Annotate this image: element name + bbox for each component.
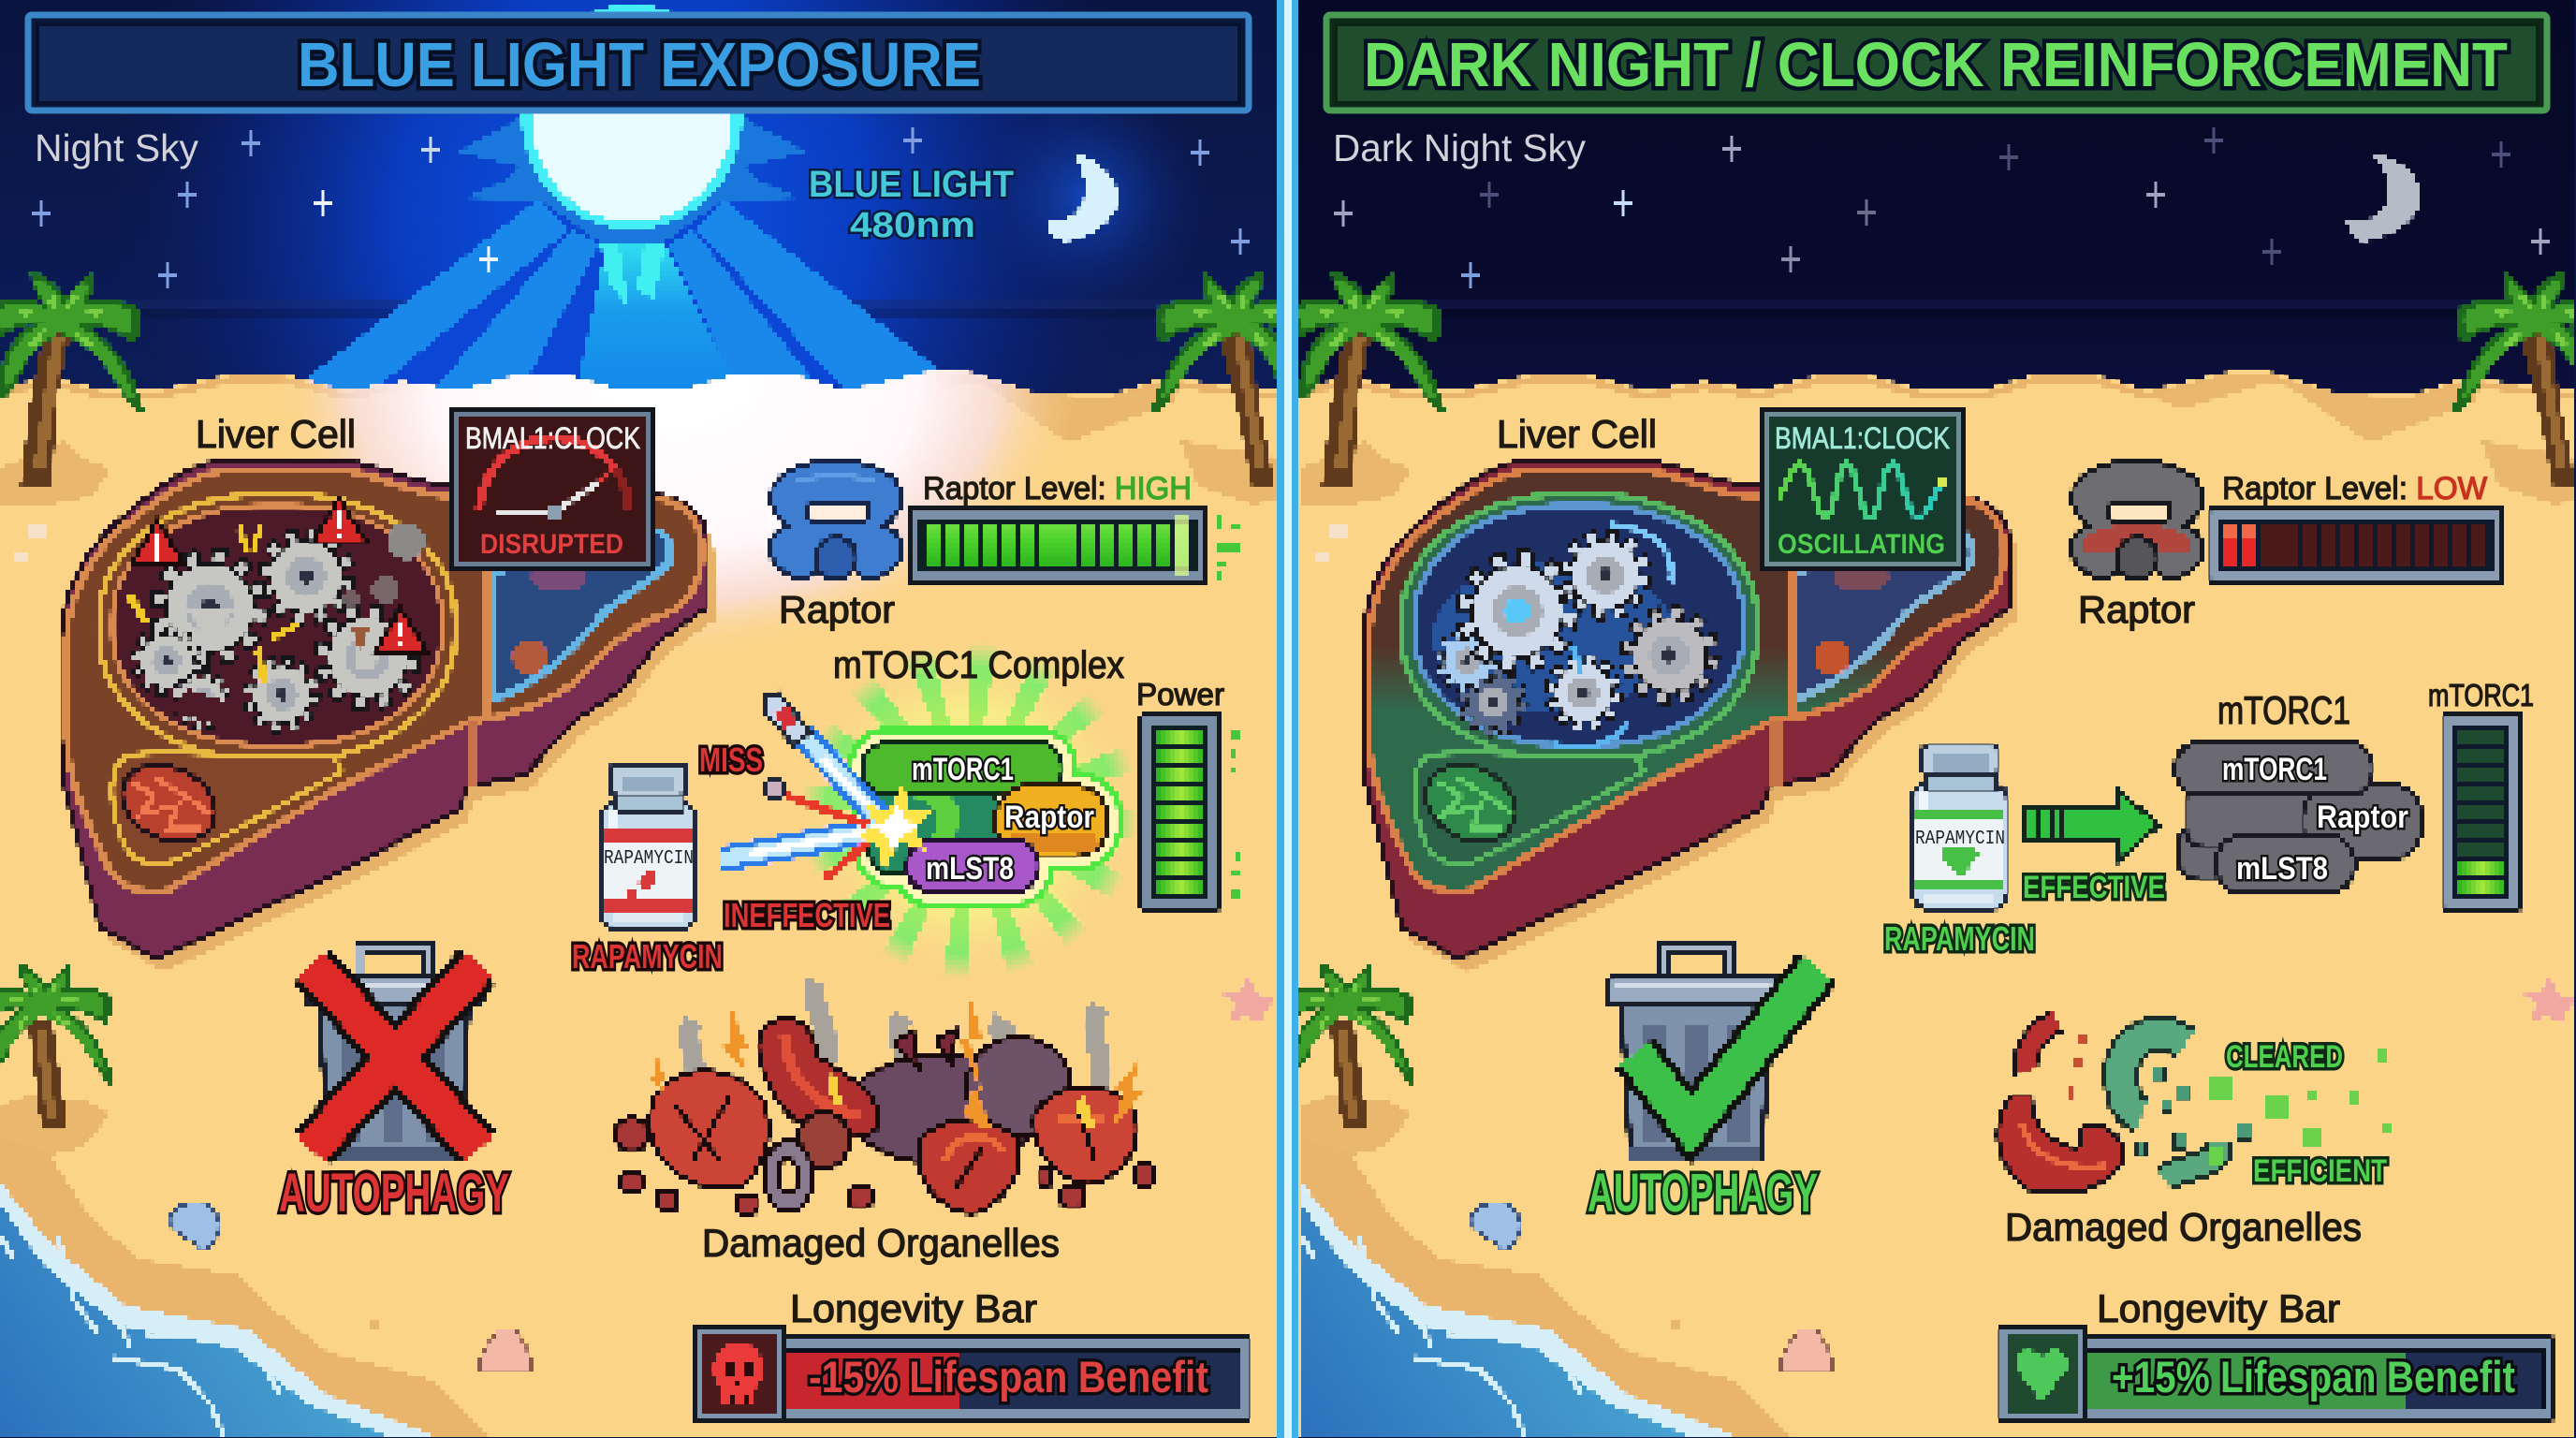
rapamycin bottle: red [601, 764, 696, 929]
BMAL1:CLOCK disrupted panel [451, 410, 654, 569]
title banner: dark night clock reinforcement: DARK NIGHT / CLOCK REINFORCEMENT [1364, 30, 2508, 100]
damaged organelles label: Damaged Organelles [702, 1221, 1060, 1265]
night sky with glow [0, 0, 1288, 403]
trash can with red X [306, 948, 482, 1160]
raptor level bar: high [909, 507, 1239, 583]
BMAL1:CLOCK label: BMAL1:CLOCK [1775, 421, 1950, 455]
liver cell label: Liver Cell [1497, 412, 1657, 456]
disrupted gears [137, 536, 414, 728]
longevity bar label: Longevity Bar [2097, 1286, 2340, 1330]
night sky label: Night Sky [35, 126, 198, 169]
icon: skull [713, 1343, 764, 1404]
mTORC1 complex heading: mTORC1 Complex [833, 643, 1124, 686]
liver cell [62, 460, 714, 972]
mTORC1 complex: inactive [2175, 742, 2422, 893]
smoke [342, 522, 425, 609]
centre divider [1277, 0, 1298, 1438]
panel: dark night clock reinforcement [1273, 0, 2576, 1438]
blue light 480nm label: 480nm [850, 206, 975, 245]
rapamycin label: RAPAMYCIN [1884, 919, 2035, 958]
complex subunit labels: mTORC1 [912, 752, 1014, 787]
longevity bar: negative [694, 1327, 1250, 1421]
liver cell label: Liver Cell [196, 412, 356, 456]
blue light 480nm label [809, 164, 1014, 245]
complex subunit labels [912, 752, 1094, 887]
lit sand under the beam [290, 370, 1058, 637]
dark night sky label: Dark Night Sky [1333, 126, 1586, 169]
disrupted status: DISRUPTED [480, 529, 623, 560]
damaged organelles label: Damaged Organelles [2005, 1205, 2362, 1249]
effective arrow [2023, 789, 2159, 862]
raptor protein: grey [2071, 461, 2203, 579]
green energy rays [797, 638, 1143, 984]
blue light beams [300, 199, 957, 393]
lifespan benefit: positive: +15% Lifespan Benefit [2112, 1352, 2515, 1401]
raptor protein: blue [769, 461, 902, 579]
healthy gears [1432, 524, 1712, 747]
sparks [127, 522, 300, 683]
stars [32, 127, 1250, 288]
power label: Power [1136, 677, 1224, 712]
power bar: high [1141, 713, 1239, 910]
warning triangles [131, 498, 429, 653]
raptor level: high: Raptor Level: HIGH [923, 471, 1192, 506]
miss callout: MISS [699, 741, 763, 779]
efficient callout: EFFICIENT [2253, 1153, 2387, 1189]
effective callout: EFFECTIVE [2023, 870, 2165, 905]
rapamycin label: RAPAMYCIN [572, 937, 723, 976]
autophagy active label: AUTOPHAGY [1588, 1163, 1818, 1224]
oscillating status: OSCILLATING [1778, 529, 1945, 560]
longevity bar label: Longevity Bar [790, 1286, 1037, 1330]
mTORC1 heading: mTORC1 [2217, 688, 2350, 732]
BMAL1:CLOCK label: BMAL1:CLOCK [465, 421, 640, 455]
crescent moon [1046, 153, 1119, 242]
rapamycin beams and burst [721, 693, 932, 878]
liver cell [1364, 460, 2016, 972]
organelles being cleared [1998, 1020, 2393, 1194]
raptor label: Raptor [2078, 588, 2195, 631]
complex subunit labels: mTORC1 [2222, 752, 2327, 787]
beach scene [1273, 275, 2576, 1438]
scene artwork: left panel [0, 0, 1305, 1438]
complex subunit labels: mLST8 [2236, 851, 2328, 887]
ineffective callout: INEFFECTIVE [724, 896, 890, 934]
complex subunit labels: mLST8 [926, 851, 1014, 887]
mTORC1 power bar: low [2443, 713, 2521, 910]
beach scene [0, 275, 1305, 1438]
bottle label text: RAPAMYCIN [604, 848, 694, 870]
raptor label: Raptor [779, 588, 895, 631]
mTORC1 bar label: mTORC1 [2428, 678, 2534, 712]
complex subunit labels [2222, 752, 2408, 887]
mTORC1 complex: active [863, 742, 1108, 893]
rapamycin bottle: green [1912, 744, 2008, 909]
complex subunit labels: Raptor [1004, 800, 1094, 835]
BMAL1:CLOCK oscillating panel [1761, 410, 1964, 569]
complex subunit labels: Raptor [2317, 800, 2408, 835]
cleared callout: CLEARED [2226, 1039, 2343, 1075]
blue light 480nm label: BLUE LIGHT [809, 164, 1014, 205]
dark night sky [1288, 0, 2576, 403]
bottle label text: RAPAMYCIN [1915, 829, 2005, 850]
damaged organelles pile [615, 981, 1155, 1213]
scene artwork: right panel [1273, 0, 2576, 1438]
title banner: blue light exposure: BLUE LIGHT EXPOSURE [298, 30, 981, 100]
blue sun [459, 5, 805, 242]
autophagy blocked label: AUTOPHAGY [279, 1163, 509, 1224]
longevity bar: positive [1998, 1327, 2553, 1421]
raptor level: low: Raptor Level: LOW [2222, 471, 2487, 506]
stars [1334, 127, 2550, 288]
crescent moon [2347, 153, 2422, 242]
title banner: blue light exposure [28, 15, 1249, 110]
icon: heart [2016, 1350, 2067, 1402]
raptor level bar: low [2209, 507, 2503, 583]
panel: blue light exposure [0, 0, 1305, 1438]
trash can with green check [1608, 948, 1818, 1160]
lifespan benefit: negative: -15% Lifespan Benefit [809, 1352, 1208, 1401]
